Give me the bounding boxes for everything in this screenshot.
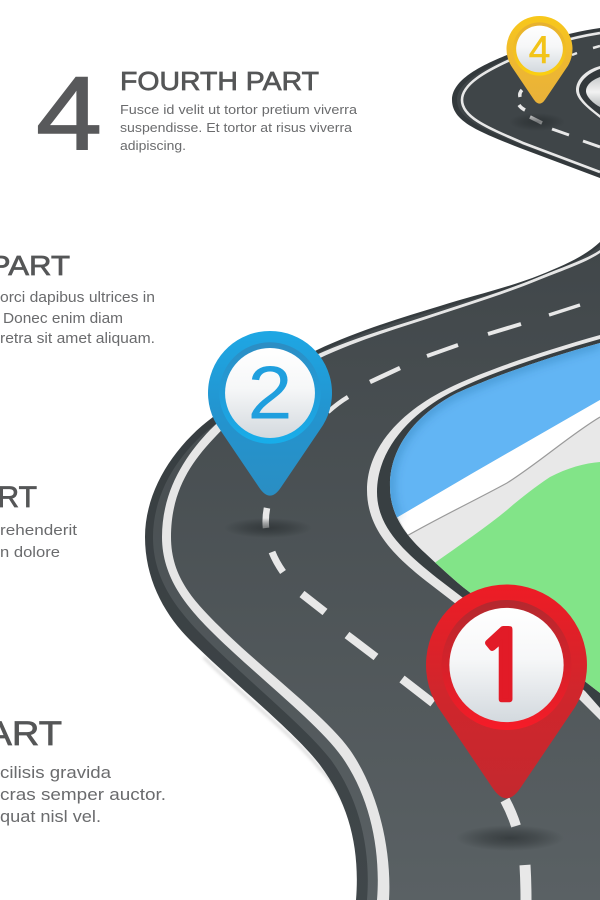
landscape inside the road bend xyxy=(390,343,600,693)
winding road: upper section xyxy=(452,28,600,178)
map pin 2: blue: 2 xyxy=(248,351,292,435)
body text: third part: orci dapibus ultrices in xyxy=(0,290,155,306)
body text: fourth part: suspendisse. Et tortor at risus viverra xyxy=(120,120,353,135)
body text: fourth part xyxy=(120,102,358,153)
map pin 1: red xyxy=(426,584,587,798)
white bank xyxy=(398,400,600,535)
upper outer white line xyxy=(462,33,600,172)
upper dashed centre line xyxy=(519,46,600,147)
map pin 2: blue xyxy=(208,331,332,496)
body text: fourth part: adipiscing. xyxy=(120,138,186,153)
body text: fourth part: Fusce id velit ut tortor pretium viverra xyxy=(120,102,358,117)
pin shadow: blue xyxy=(224,518,312,538)
heading: fourth part xyxy=(36,56,358,172)
body text: first part: cras semper auctor. xyxy=(0,786,166,804)
road island xyxy=(576,66,600,118)
body text: second part xyxy=(0,522,78,561)
text block: first part xyxy=(0,715,166,826)
map pin 4: yellow xyxy=(506,16,572,104)
body text: third part: retra sit amet aliquam. xyxy=(0,331,155,347)
water xyxy=(390,343,600,518)
body text: third part: Donec enim diam xyxy=(3,311,123,327)
pin shadow: yellow xyxy=(509,113,565,131)
green field xyxy=(433,462,600,710)
big numeral 4: 4 xyxy=(36,56,102,172)
pin shadow: red xyxy=(456,825,564,851)
outer white lane line xyxy=(162,250,600,900)
body text: first part: cilisis gravida xyxy=(0,764,112,782)
body text: first part: quat nisl vel. xyxy=(0,808,101,826)
inner road edge xyxy=(377,339,600,708)
body text: first part xyxy=(0,764,166,826)
body text: third part xyxy=(0,290,155,347)
winding road: lower section xyxy=(145,242,600,900)
road surface xyxy=(153,246,600,900)
map pin 1: red: 1 xyxy=(475,621,532,715)
body text: second part: n dolore xyxy=(0,544,60,561)
text block: second part xyxy=(0,481,78,561)
dashed centre line xyxy=(266,305,580,900)
map pin 4: yellow: 4 xyxy=(529,29,550,72)
text block: third part xyxy=(0,250,155,347)
upper road edge xyxy=(452,28,600,178)
title: fourth part: FOURTH PART xyxy=(120,66,319,96)
upper road surface xyxy=(457,31,600,174)
body text: second part: rehenderit xyxy=(0,522,78,539)
road outer edge xyxy=(145,242,600,900)
inner white lane line xyxy=(367,335,600,720)
